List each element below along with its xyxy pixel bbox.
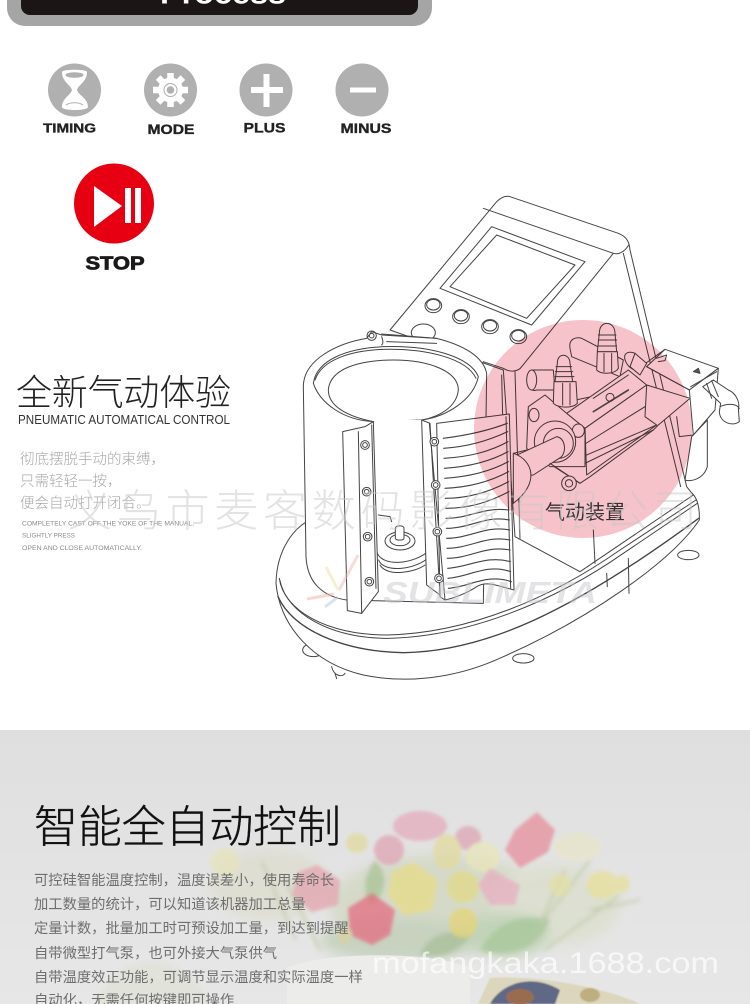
left jaw with screws <box>343 422 378 613</box>
soft foliage <box>210 850 620 962</box>
top banner: Process <box>7 0 432 26</box>
icon: mode gear <box>144 64 197 137</box>
white mug <box>287 955 470 1004</box>
icon: minus: MINUS <box>340 120 392 136</box>
mug heater cylinder <box>303 331 487 603</box>
solenoid valve <box>647 349 718 390</box>
mug press bottom platform <box>377 515 430 573</box>
printed mug <box>478 977 640 1004</box>
left mug <box>96 962 210 1004</box>
leaves and stems <box>262 860 640 956</box>
watermark: site address: mofangkaka.1688.com <box>372 947 719 980</box>
text block: pneumatic description: COMPLETELY CAST OFF THE YOKE OF THE MANUAL, <box>22 520 194 528</box>
right jaw with heat fins <box>422 414 514 600</box>
tubes <box>528 370 555 390</box>
text block: pneumatic description: 便会自动打开闭合。 <box>20 492 150 513</box>
text block: control features: 可控硅智能温度控制，温度误差小，使用寿命长 <box>34 869 334 890</box>
fitting left <box>553 382 577 407</box>
piston rod <box>513 437 564 475</box>
watermark: logo <box>307 555 597 610</box>
text block: control features: 自带微型打气泵，也可外接大气泵供气 <box>34 942 277 963</box>
watermark: logo: SUBLIMETA <box>383 575 597 610</box>
icon: stop play-pause <box>74 164 154 274</box>
text block: pneumatic description: SLIGHTLY PRESS <box>22 532 76 540</box>
heading: smart automatic control: 智能全自动控制 <box>34 791 341 855</box>
end plate <box>527 395 585 467</box>
piston body <box>567 370 647 428</box>
flower photo <box>96 811 640 1004</box>
flower blossoms <box>210 811 630 945</box>
heading: pneumatic experience: PNEUMATIC AUTOMATICAL CONTROL <box>18 412 230 427</box>
heading: pneumatic experience: 全新气动体验 <box>16 364 231 416</box>
base bracket plate <box>528 385 690 483</box>
text block: pneumatic description <box>20 448 194 552</box>
callout: pneumatic device: 气动装置 <box>545 496 625 525</box>
text block: control features: 自带温度效正功能，可调节显示温度和实际温度一样 <box>34 966 363 987</box>
text block: pneumatic description: 只需轻轻一按， <box>20 470 122 491</box>
watermark: company name: 义乌市麦客数码影像有限公司 <box>68 475 697 539</box>
text block: control features: 加工数量的统计，可以知道该机器加工总量 <box>34 893 306 914</box>
pink highlight circle <box>474 320 692 538</box>
text block: control features <box>34 869 363 1004</box>
text block: control features: 定量计数，批量加工时可预设加工量，到达到提醒 <box>34 917 349 938</box>
panel: smart control background <box>0 730 750 1004</box>
icon: minus <box>336 64 392 136</box>
text block: pneumatic description: 彻底摆脱手动的束缚， <box>20 448 165 469</box>
machine line drawing <box>276 196 739 679</box>
machine base plate <box>276 490 699 679</box>
control buttons <box>411 299 527 344</box>
fitting right <box>597 352 618 373</box>
icon: plus <box>240 64 292 136</box>
icon: stop play-pause: STOP <box>86 254 144 274</box>
machine rear housing <box>390 196 707 572</box>
icon: plus: PLUS <box>244 120 286 136</box>
icon: mode gear: MODE <box>148 121 194 137</box>
elbow fitting <box>703 380 739 424</box>
icon: timing hourglass: TIMING <box>43 120 96 136</box>
pneumatic cylinder assembly <box>513 323 739 503</box>
icon: timing hourglass <box>43 64 101 136</box>
logo on piston <box>593 390 628 412</box>
text block: pneumatic description: OPEN AND CLOSE AUTOMATICALLY. <box>22 545 142 552</box>
